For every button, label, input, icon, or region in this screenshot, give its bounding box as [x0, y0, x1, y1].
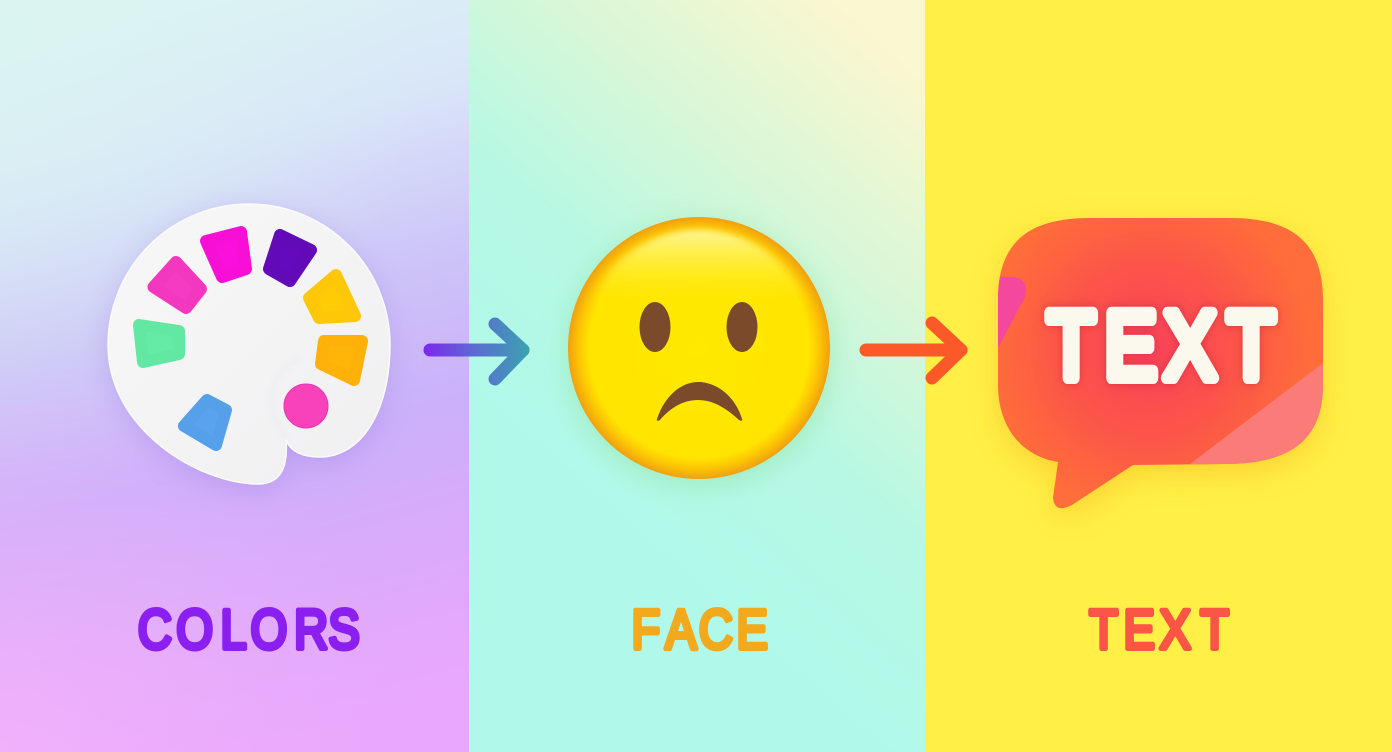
swatch: magenta: [206, 232, 246, 277]
swatch: purple: [269, 235, 311, 281]
arrow: colors to face: [430, 324, 523, 379]
swatch: yellow: [309, 275, 355, 318]
label: face: FACE: [632, 598, 768, 661]
swatch: orange: [321, 341, 362, 380]
highlight: magenta spot: [998, 277, 1026, 348]
icon: sad face: [568, 217, 830, 485]
eye: right: [726, 302, 758, 352]
swatch: pink: [154, 262, 201, 308]
label: text: TEXT: [1089, 598, 1229, 661]
icon: paint palette: [108, 204, 390, 490]
mouth: frown: [657, 382, 742, 421]
eye: left: [640, 302, 670, 352]
panel: colors background: [0, 0, 469, 752]
swatch: green: [139, 325, 179, 362]
icon: speech bubble: [990, 218, 1330, 515]
label: colors: COLORS: [138, 598, 360, 661]
arrow: face to text: [866, 323, 961, 378]
bubble word: TEXT: TEXT: [1047, 293, 1275, 399]
panel: face background: [469, 0, 925, 752]
swatch: pink circle: [284, 384, 328, 428]
highlight: pink corner: [1190, 363, 1330, 470]
swatch: blue: [184, 400, 226, 445]
panel: text background: [925, 0, 1392, 752]
